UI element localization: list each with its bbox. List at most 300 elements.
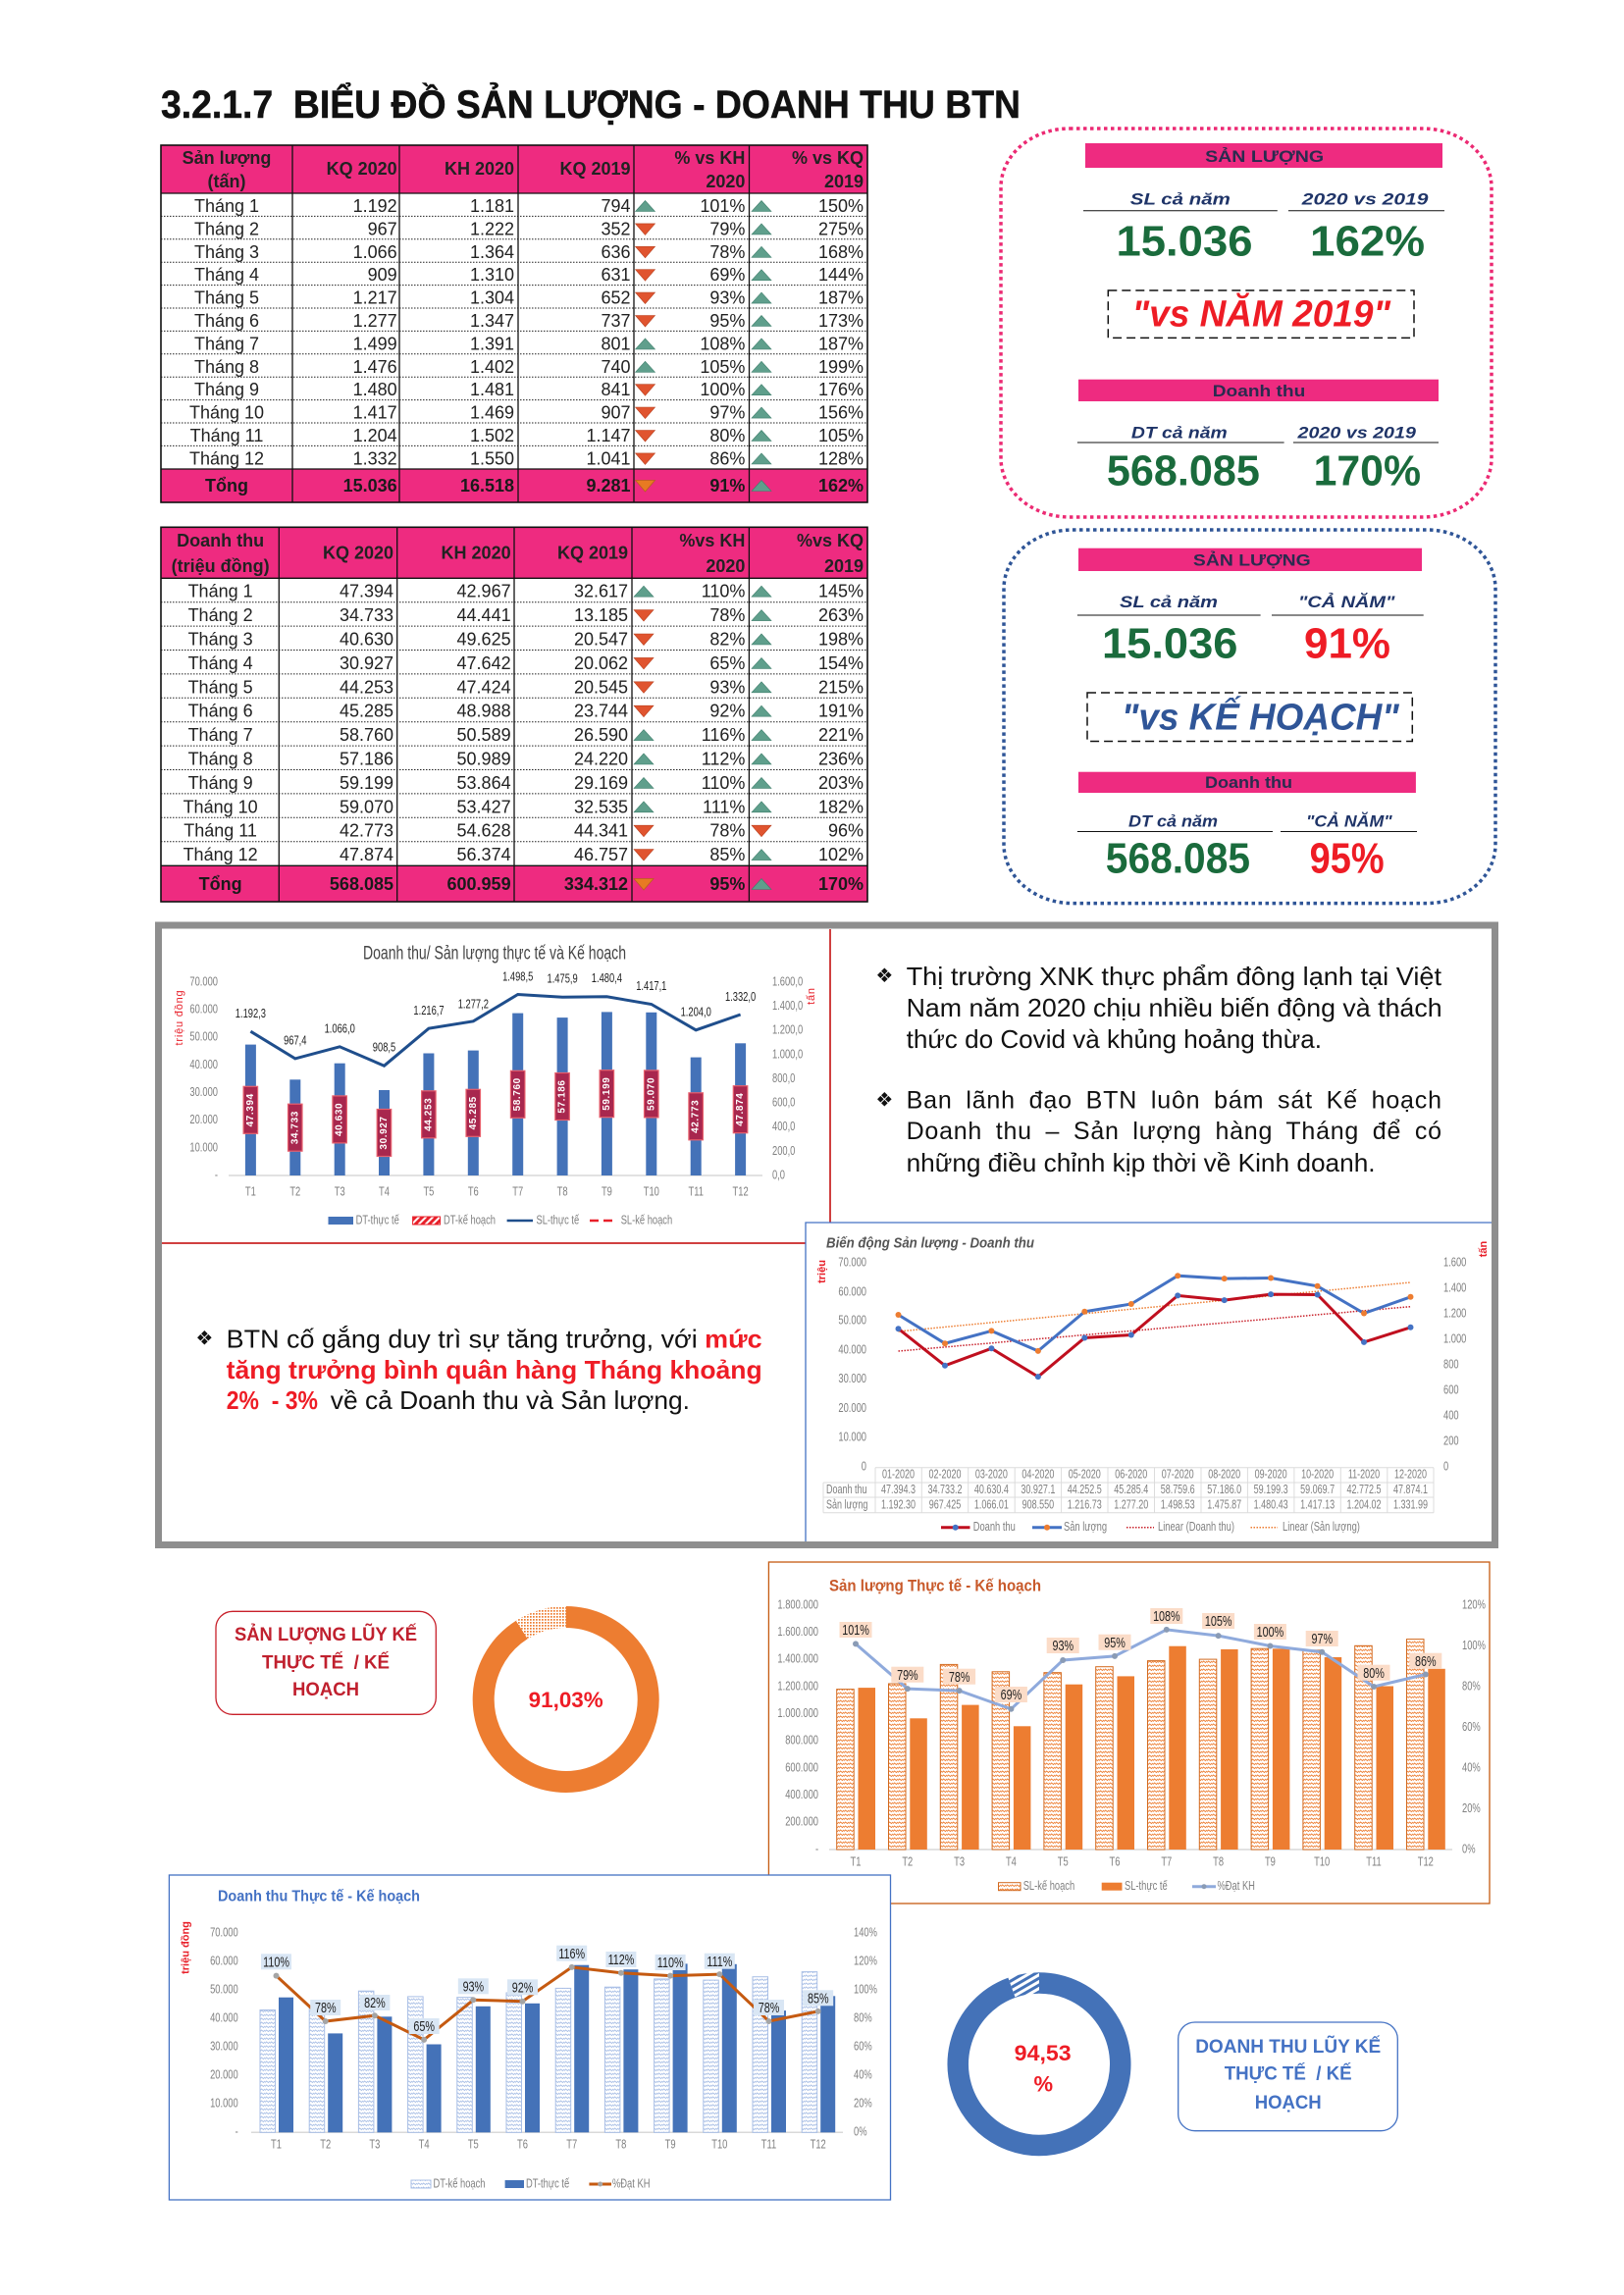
table rows: Tháng 9 [188,773,253,793]
table total row: 170% [818,874,864,894]
table rows: 32.617 [574,582,628,601]
percent labels: 101% [842,1621,869,1639]
table rows: Tháng 2 [194,219,259,238]
table rows: Tháng 7 [194,334,259,353]
table rows: 112% [702,750,745,769]
table rows: Tháng 2 [188,605,253,625]
label box: doanh thu lũy kế: THỰC TẾ / KẾ [1225,2062,1352,2084]
table rows: 187% [818,334,864,353]
data table: Sản lượng [826,1498,867,1512]
line value labels: 1.332,0 [725,991,756,1005]
right axis: tấn [1478,1240,1490,1257]
table rows: 78% [709,821,745,841]
sl cả năm: SL cả năm [1130,190,1231,208]
left axis: 40.000 [838,1343,866,1357]
right axis: 0 [1443,1460,1448,1474]
plan bars [837,1640,1424,1850]
category labels: T4 [1006,1855,1017,1869]
table rows: Tháng 12 [183,845,258,864]
text block: tăng trưởng: ❖ [195,1328,213,1349]
left axis [777,1598,818,1856]
right axis: 200,0 [772,1145,795,1158]
percent labels [261,1945,833,2035]
table total row: 600.959 [447,874,511,894]
data table [823,1468,1434,1513]
table rows: 168% [818,242,864,262]
table rows: 1.402 [470,357,514,377]
table rows: 30.927 [340,653,393,673]
chart: doanh thu thực tế kế hoạch [169,1875,890,2200]
bar value labels: 47.874 [735,1093,746,1126]
left axis [180,1921,238,2139]
table rows: 636 [601,242,630,262]
category labels: T2 [289,1185,300,1199]
table rows: 57.186 [340,750,393,769]
right axis: 600 [1443,1383,1459,1397]
sản lượng bar [1085,143,1442,168]
panel: vs năm 2019 [1001,129,1492,517]
left axis: 70.000 [838,1256,866,1270]
left axis: 0 [862,1460,866,1474]
data table: 10-2020 [1301,1468,1334,1482]
percent labels: 92% [512,1979,534,1996]
percent labels: 97% [1311,1630,1333,1647]
table rows: 1.417 [353,403,397,423]
table rows: 59.070 [340,797,393,816]
category labels: T5 [468,2138,479,2152]
percent labels: 86% [1415,1652,1437,1669]
right axis: 1.200,0 [772,1023,803,1037]
data table: 1.498.53 [1161,1498,1195,1512]
table header: KH 2020 [442,544,511,563]
table rows: Tháng 3 [188,630,253,650]
cả năm: "CẢ NĂM" [1298,593,1395,611]
line value labels [236,970,756,1055]
dt cả năm [1077,812,1273,883]
table rows: 652 [601,288,630,308]
category labels: T7 [512,1185,523,1199]
right axis: 140% [854,1926,877,1940]
sl cả năm [1083,190,1278,265]
chart title: Sản lượng Thực tế - Kế hoạch [829,1576,1041,1595]
2020 vs 2019: 2020 vs 2019 [1301,190,1429,208]
table rows: 47.424 [457,677,511,697]
sl cả năm [1077,593,1261,667]
table header: % vs KH [674,148,745,168]
data table: 09-2020 [1255,1468,1287,1482]
dt cả năm: DT cả năm [1131,424,1228,442]
legend: Linear (Doanh thu) [1158,1521,1234,1535]
table rows: 1.304 [470,288,514,308]
line value labels: 967,4 [284,1034,306,1048]
table rows: 1.550 [470,448,514,468]
line: sản lượng thực tế [250,995,741,1066]
category labels: T3 [369,2138,380,2152]
line value labels: 908,5 [373,1041,395,1055]
table rows: 44.341 [574,821,628,841]
category labels [271,2138,826,2152]
left axis: 40.000 [210,2011,238,2025]
table header: KQ 2020 [327,159,397,179]
table rows: 47.642 [457,653,511,673]
table total row: 334.312 [564,874,628,894]
line value labels: 1.480,4 [592,972,622,986]
data table: 1.417.13 [1300,1498,1335,1512]
bar value labels: 57.186 [557,1079,568,1114]
table header: KQ 2020 [323,544,393,563]
category labels: T1 [271,2138,282,2152]
table rows: 128% [818,448,864,468]
left axis: 50.000 [838,1314,866,1328]
text block: thị trường: ❖ [875,965,893,987]
table header: %vs KH [679,531,745,550]
table rows: 221% [818,725,864,745]
doanh thu bar: Doanh thu [1205,773,1292,792]
table rows: 93% [709,288,745,308]
line value labels: 1.204,0 [681,1006,711,1019]
text block: ban lãnh đạo [875,1087,1441,1177]
category labels: T5 [423,1185,434,1199]
text block: thị trường: Nam năm 2020 chịu nhiều biến động và thách [907,993,1442,1022]
table rows: 352 [601,219,630,238]
left axis: 50.000 [210,1983,238,1997]
table rows: 92% [709,702,745,721]
data table: 07-2020 [1162,1468,1194,1482]
percent labels: 78% [759,1999,780,2016]
right axis: 400,0 [772,1121,795,1134]
table rows: Tháng 6 [188,702,253,721]
percent labels: 112% [608,1951,635,1968]
text block: ban lãnh đạo: Ban lãnh đạo BTN luôn bám sát Kế hoạch [907,1087,1441,1115]
legend: SL-kế hoạch [621,1214,672,1227]
data table: 05-2020 [1069,1468,1101,1482]
left axis: 60.000 [189,1003,218,1017]
bar value labels: 40.630 [335,1103,345,1136]
line: doanh thu [895,1291,1413,1380]
sản lượng bar [1078,548,1422,571]
data table: 1.066.01 [974,1498,1009,1512]
table header: KQ 2019 [557,544,628,563]
table rows: 54.628 [457,821,511,841]
table rows: 44.441 [457,605,511,625]
percent labels: 95% [1104,1634,1126,1650]
label box: sản lượng lũy kế: SẢN LƯỢNG LŨY KẾ [235,1624,417,1645]
text block: tăng trưởng [195,1324,762,1415]
percent labels: 93% [463,1978,484,1995]
right axis: 600,0 [772,1096,795,1110]
table rows: 78% [709,605,745,625]
category labels: T6 [468,1185,479,1199]
data table: 42.772.5 [1347,1484,1381,1496]
data table: 58.759.6 [1161,1484,1195,1496]
right axis: tấn [806,987,817,1005]
left axis: 50.000 [189,1030,218,1044]
2020 vs 2019 [1288,190,1444,265]
table rows: 801 [601,334,630,353]
table rows: 97% [709,403,745,423]
table rows: Tháng 4 [188,653,253,673]
left axis: - [815,1843,818,1856]
right axis: 80% [854,2011,872,2025]
table header: (tấn) [208,172,245,191]
table rows: 58.760 [340,725,393,745]
percent labels: 65% [413,2017,435,2035]
left axis: 1.000.000 [777,1707,818,1721]
table rows: 1.204 [353,426,397,445]
panel: vs kế hoạch [1004,530,1495,904]
left axis: 10.000 [838,1431,866,1444]
category labels: T3 [954,1855,965,1869]
left axis: triệu [816,1260,828,1283]
data table: 06-2020 [1115,1468,1147,1482]
sl cả năm: SL cả năm [1120,593,1218,611]
category labels: T10 [1314,1855,1330,1869]
left axis: 30.000 [210,2040,238,2054]
table rows: 1.481 [470,380,514,399]
category labels: T12 [1418,1855,1434,1869]
table rows: 24.220 [574,750,628,769]
table rows: 86% [709,448,745,468]
table rows: 95% [709,311,745,331]
table rows: Tháng 4 [194,265,259,285]
label box: sản lượng lũy kế [216,1611,436,1714]
data table: 30.927.1 [1021,1484,1055,1496]
left axis: 30.000 [189,1086,218,1099]
table rows: 1.041 [586,448,630,468]
category labels: T8 [1213,1855,1224,1869]
table rows: 53.864 [457,773,511,793]
table rows: 50.989 [457,750,511,769]
table rows: 1.476 [353,357,397,377]
percent labels: 78% [949,1668,970,1685]
left axis: 60.000 [210,1955,238,1968]
2020 vs 2019 [1293,424,1439,495]
table rows: 191% [818,702,864,721]
table total row: Tổng [199,874,242,894]
category labels: T5 [1058,1855,1069,1869]
right axis: 1.000,0 [772,1048,803,1062]
text block: thị trường: thức do Covid và khủng hoảng thừa. [907,1024,1322,1054]
plan bars [260,1972,817,2132]
table rows: 907 [601,403,630,423]
actual bars [279,1963,835,2132]
legend: %Đạt KH [612,2177,650,2191]
table rows: 144% [818,265,864,285]
right axis: 1.400 [1443,1281,1466,1295]
left axis: 1.800.000 [777,1598,818,1612]
text block: ban lãnh đạo: ❖ [875,1090,893,1112]
table rows: 198% [818,630,864,650]
percent labels: 78% [315,1999,337,2016]
table rows: 26.590 [574,725,628,745]
text block: thị trường: Thị trường XNK thực phẩm đông lạnh tại Việt [907,962,1442,991]
text block: tăng trưởng: 2% - 3% [227,1385,318,1415]
callout vs kế hoạch: "vs KẾ HOẠCH" [1122,696,1400,739]
table rows: 105% [818,426,864,445]
category labels: T1 [245,1185,256,1199]
doanh thu bar: Doanh thu [1213,382,1305,400]
table rows: 47.874 [340,845,393,864]
table total row: 162% [818,476,864,496]
table rows: 111% [703,797,745,816]
data table: 34.733.2 [928,1484,962,1496]
bar value labels: 59.199 [602,1077,612,1111]
table rows: Tháng 1 [188,582,253,601]
doanh thu bar [1078,772,1416,793]
table rows: Tháng 9 [194,380,259,399]
right axis: 800,0 [772,1072,795,1085]
right axis: 40% [1462,1761,1481,1775]
percent labels: 105% [1205,1612,1232,1630]
table total row: 9.281 [586,476,630,496]
right axis: 1.200 [1443,1307,1466,1321]
table rows [183,582,864,864]
table rows: 1.181 [470,196,514,216]
left axis: triệu đồng [180,1921,191,1974]
table rows: 59.199 [340,773,393,793]
table rows: Tháng 7 [188,725,253,745]
left axis: 600.000 [785,1761,818,1775]
line value labels: 1.192,3 [236,1008,266,1021]
table rows: 32.535 [574,797,628,816]
category labels: T4 [379,1185,390,1199]
category labels: T12 [811,2138,826,2152]
category labels: T12 [733,1185,749,1199]
data table: 1.475.87 [1207,1498,1241,1512]
sản lượng bar: SẢN LƯỢNG [1193,551,1311,569]
category labels: T10 [644,1185,659,1199]
category labels: T8 [615,2138,626,2152]
percent labels: 85% [808,1990,829,2007]
left axis: 10.000 [189,1141,218,1155]
2020 vs 2019: 170% [1314,447,1421,495]
category labels: T6 [517,2138,528,2152]
table rows: 105% [700,357,745,377]
table rows: 80% [709,426,745,445]
sản lượng bar: SẢN LƯỢNG [1205,147,1324,166]
sl cả năm: 15.036 [1117,218,1252,265]
table rows: Tháng 8 [188,750,253,769]
data table: 01-2020 [882,1468,915,1482]
table rows: 100% [700,380,745,399]
table rows: 47.394 [340,582,393,601]
table rows: Tháng 11 [183,821,257,841]
bar value labels: 44.253 [423,1098,434,1131]
left axis: triệu đồng [174,990,185,1045]
table rows: 69% [709,265,745,285]
left axis: 70.000 [210,1926,238,1940]
category labels: T9 [665,2138,676,2152]
table rows: 182% [818,797,864,816]
text block: tăng trưởng: BTN cố gắng duy trì sự tăng trưởng, với mức [227,1324,762,1353]
trend lines [899,1282,1411,1351]
left axis: 20.000 [189,1114,218,1127]
table rows: 45.285 [340,702,393,721]
donut: 94,53% [958,1983,1121,2145]
bar value labels: 45.285 [468,1096,479,1129]
table header: 2019 [824,172,864,191]
table rows: 173% [818,311,864,331]
legend: SL-thực tế [537,1214,580,1227]
data table: 03-2020 [975,1468,1008,1482]
chart title: Doanh thu/ Sản lượng thực tế và Kế hoạch [363,944,626,964]
table rows: 199% [818,357,864,377]
category labels: T9 [1265,1855,1276,1869]
data table: 45.285.4 [1114,1484,1148,1496]
data table: Doanh thu [826,1484,866,1496]
table rows: 275% [818,219,864,238]
data table: 59.069.7 [1300,1484,1335,1496]
right axis: 400 [1443,1409,1459,1423]
line value labels: 1.498,5 [502,970,533,984]
legend: Doanh thu [973,1521,1016,1535]
grey frame panel [159,925,1495,1544]
table header: KH 2020 [445,159,514,179]
percent labels: 108% [1153,1607,1180,1625]
category labels: T3 [335,1185,345,1199]
table rows: 740 [601,357,630,377]
line value labels: 1.277,2 [458,998,489,1012]
table rows: 794 [601,196,630,216]
table rows: Tháng 5 [188,677,253,697]
cả năm: "CẢ NĂM" [1306,812,1393,830]
table rows: 42.967 [457,582,511,601]
right axis: 1.400,0 [772,1000,803,1013]
percent labels [840,1607,1441,1703]
table rows: 1.066 [353,242,397,262]
data table: 1.331.99 [1393,1498,1428,1512]
dt cả năm: 568.085 [1106,834,1250,883]
right axis: 120% [854,1955,877,1968]
right axis: 0% [1462,1843,1476,1856]
table rows: 20.545 [574,677,628,697]
left axis: 70.000 [189,975,218,989]
bar value labels [243,1070,748,1156]
legend: DT-kế hoạch [444,1214,496,1227]
table rows: 1.502 [470,426,514,445]
data table: 04-2020 [1022,1468,1054,1482]
table rows: Tháng 8 [194,357,259,377]
table rows: 48.988 [457,702,511,721]
right axis: 80% [1462,1680,1481,1694]
table rows: 841 [601,380,630,399]
actual bars [858,1646,1445,1850]
bar value labels: 30.927 [379,1116,390,1150]
line value labels: 1.417,1 [636,980,666,994]
table rows: 46.757 [574,845,628,864]
bar value labels: 42.773 [691,1100,702,1133]
legend: DT-thực tế [526,2177,570,2191]
data table: 11-2020 [1348,1468,1380,1482]
data table: 1.204.02 [1347,1498,1381,1512]
category labels: T4 [419,2138,430,2152]
bar value labels: 59.070 [646,1077,656,1111]
table rows: 1.332 [353,448,397,468]
left axis: - [236,2125,238,2139]
bar value labels: 47.394 [245,1093,256,1126]
donut: 94,53%: 94,53 [1015,2041,1072,2065]
category labels: T11 [761,2138,776,2152]
cả năm: 95% [1310,834,1385,883]
table rows: 102% [818,845,864,864]
table rows: Tháng 11 [190,426,263,445]
chart: biến động sản lượng doanh thu [806,1223,1492,1541]
left axis [174,975,218,1182]
table rows: 154% [818,653,864,673]
donut: 91,03%: 91,03% [529,1688,603,1712]
label box: sản lượng lũy kế: HOẠCH [292,1680,359,1700]
table rows: Tháng 3 [194,242,259,262]
